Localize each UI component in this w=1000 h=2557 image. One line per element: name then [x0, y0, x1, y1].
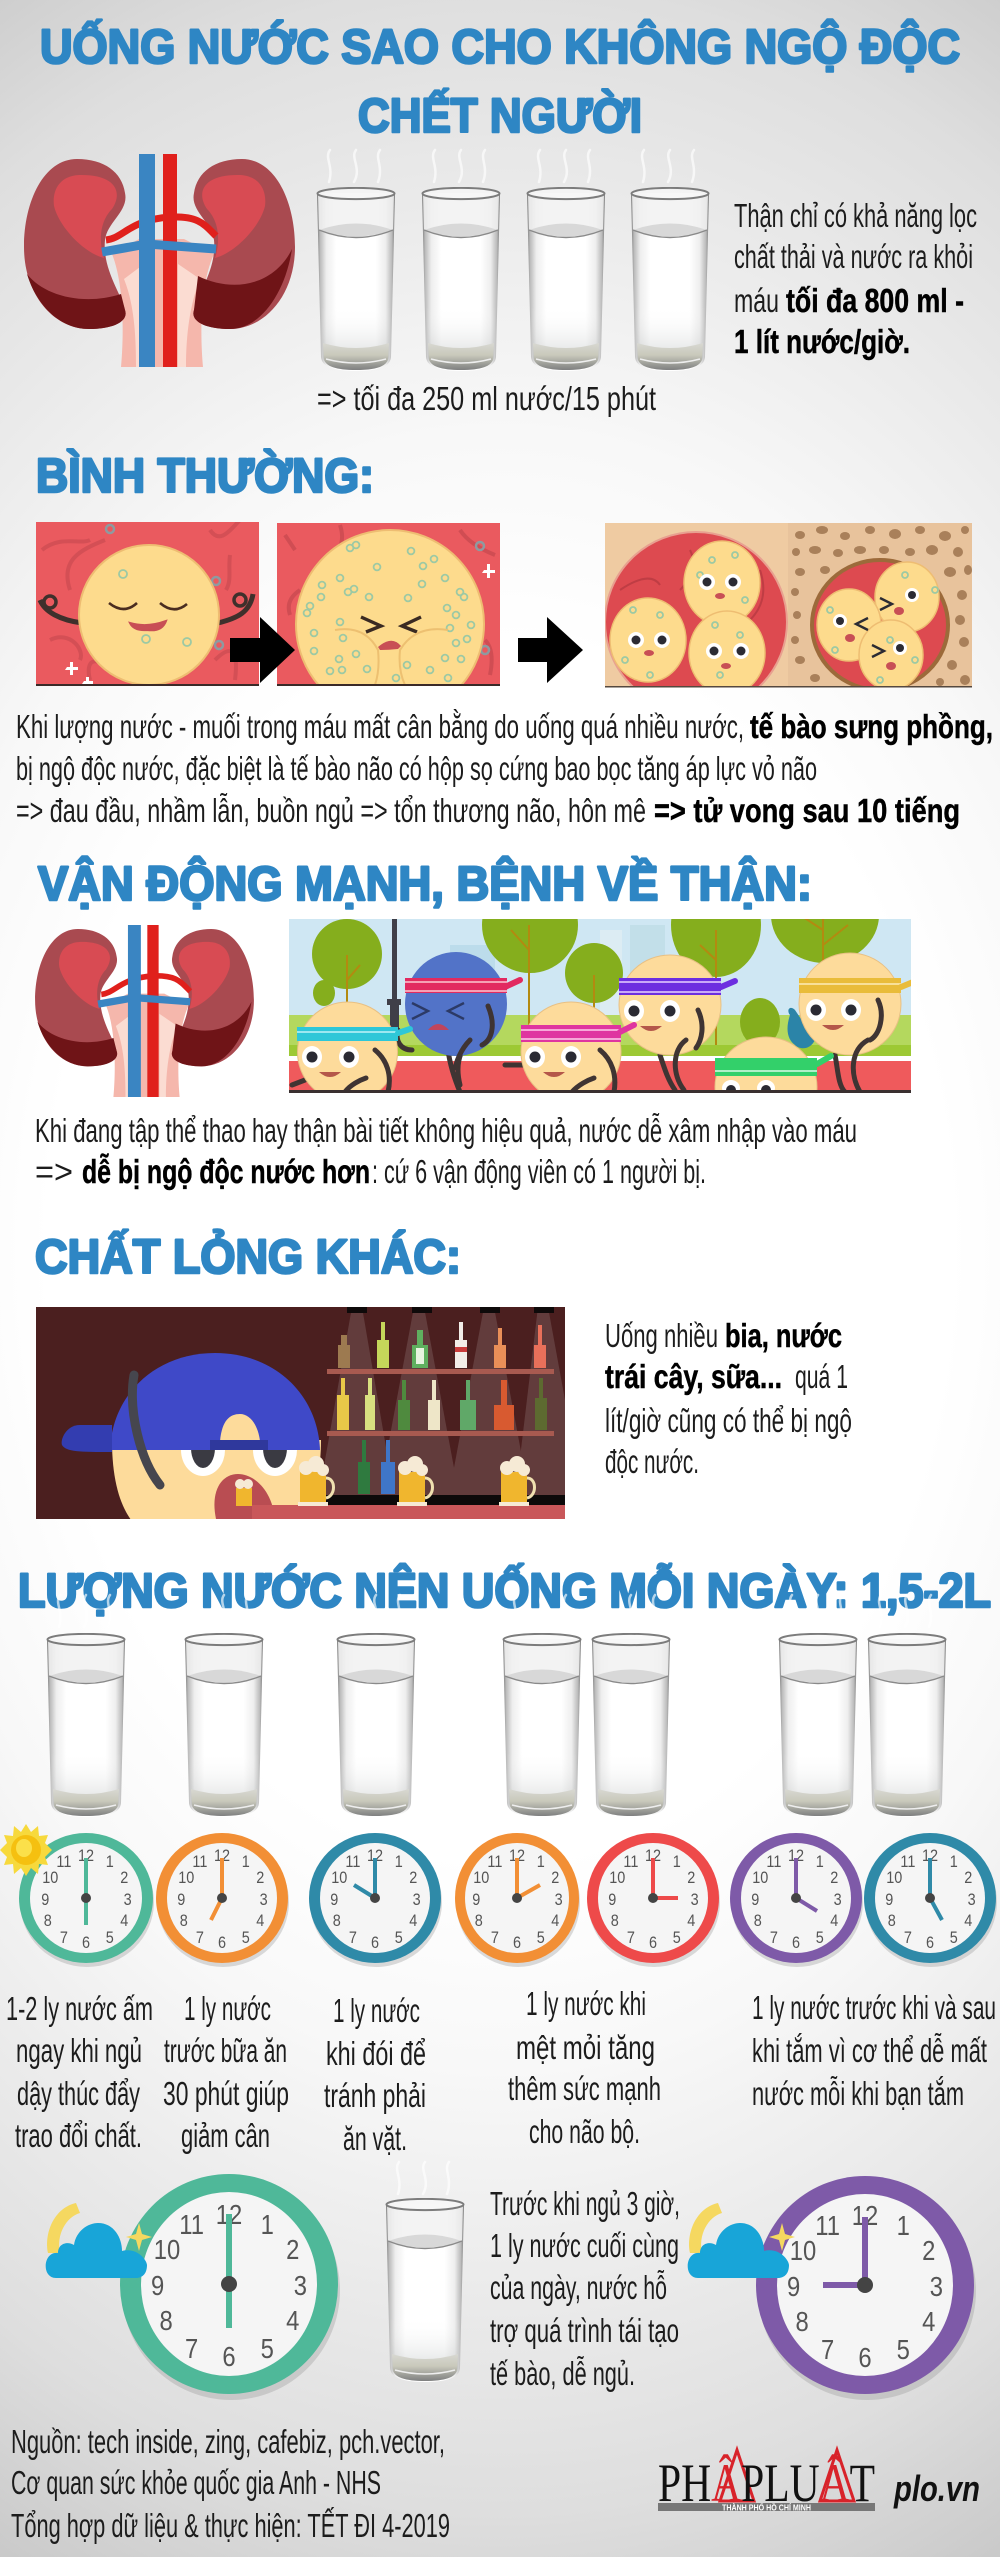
clock 4:00: 6 — [792, 1934, 800, 1952]
icon: kidneys small — [35, 925, 254, 1097]
clock 6:00: 8 — [44, 1912, 52, 1930]
caption: wake up: trao đổi chất. — [15, 2117, 142, 2154]
clock 6:00: 4 — [120, 1912, 128, 1930]
heading: other liquids: CHẤT LỎNG KHÁC: — [35, 1229, 461, 1284]
big clock 18:00 — [120, 2174, 340, 2400]
clock 10:00: 4 — [409, 1912, 417, 1930]
big clock 18:00: 2 — [286, 2233, 299, 2265]
clock 5:00: 12 — [922, 1847, 938, 1865]
big clock 21:00: 8 — [795, 2305, 809, 2337]
clock 4:00: 1 — [816, 1853, 824, 1871]
caption: when hungry: ăn vặt. — [343, 2120, 407, 2157]
big clock 21:00: 6 — [858, 2341, 872, 2373]
big clock 18:00: 7 — [185, 2332, 198, 2364]
source credits — [11, 2423, 450, 2544]
caption: wake up — [6, 1990, 153, 2154]
clock 10:00: 3 — [413, 1891, 421, 1909]
text: other liquids explanation: Uống nhiều — [605, 1317, 718, 1354]
source credits: Tổng hợp dữ liệu & thực hiện: TẾT ĐI 4-2019 — [11, 2507, 450, 2544]
clock 6:00: 1 — [106, 1853, 114, 1871]
clock 3:00 — [587, 1833, 720, 1967]
caption: when hungry: tránh phải — [324, 2077, 426, 2114]
text: other liquids explanation — [605, 1317, 852, 1480]
clock 5:00: 1 — [950, 1853, 958, 1871]
clock 6:00: 11 — [56, 1853, 71, 1871]
clock 4:00: 10 — [752, 1869, 769, 1887]
clock 10:00: 5 — [395, 1929, 403, 1947]
clock 10:00: 10 — [331, 1869, 348, 1887]
logo: plo.vn: plo.vn — [893, 2468, 980, 2509]
big clock 21:00: 5 — [897, 2333, 910, 2365]
caption: before meal: 1 ly nước — [184, 1990, 271, 2027]
clock 10:00: 7 — [349, 1929, 357, 1947]
clock 7:00: 3 — [260, 1891, 268, 1909]
big clock 18:00: 1 — [261, 2208, 274, 2240]
clock 4:00: 7 — [770, 1929, 778, 1947]
clock 4:00: 12 — [788, 1847, 804, 1865]
clock 5:00: 9 — [885, 1891, 893, 1909]
text: before sleep: trợ quá trình tái tạo — [490, 2312, 679, 2349]
clock 2:00: 10 — [473, 1869, 490, 1887]
big clock 21:00: 3 — [930, 2270, 943, 2302]
title: CHẾT NGƯỜI — [358, 88, 642, 143]
clock 5:00 — [864, 1833, 997, 1967]
clock 7:00: 4 — [256, 1912, 264, 1930]
clock 7:00: 6 — [218, 1934, 226, 1952]
clock 4:00: 2 — [830, 1869, 838, 1887]
clock 6:00 — [19, 1833, 154, 1967]
big clock 21:00: 7 — [821, 2333, 834, 2365]
clock 2:00: 1 — [537, 1853, 545, 1871]
caption: before meal: 30 phút giúp — [163, 2075, 289, 2112]
clock 6:00: 3 — [124, 1891, 132, 1909]
clock 6:00: 7 — [60, 1929, 68, 1947]
clock 3:00: 9 — [608, 1891, 616, 1909]
text: exercise explanation: : cứ 6 vận động viên có 1 người bị. — [372, 1153, 706, 1190]
clock 5:00: 10 — [886, 1869, 903, 1887]
icon: moon and cloud right — [688, 2203, 795, 2278]
caption: bathing — [752, 1989, 996, 2112]
clock 5:00: 5 — [950, 1929, 958, 1947]
clock 7:00: 8 — [180, 1912, 188, 1930]
text: before sleep: 1 ly nước cuối cùng — [490, 2227, 679, 2264]
clock 10:00: 8 — [333, 1912, 341, 1930]
text: before sleep: Trước khi ngủ 3 giờ, — [490, 2185, 680, 2222]
clock 3:00: 3 — [691, 1891, 699, 1909]
clock 7:00: 1 — [242, 1853, 250, 1871]
big clock 18:00: 6 — [222, 2340, 236, 2372]
title: UỐNG NƯỚC SAO CHO KHÔNG NGỘ ĐỘC — [40, 19, 960, 74]
clock 2:00: 12 — [509, 1847, 525, 1865]
logo: Pháp Luật: PHÂPLUÂT — [658, 2453, 875, 2513]
big clock 21:00: 12 — [852, 2199, 878, 2231]
clock 3:00: 11 — [623, 1853, 638, 1871]
icon: sun — [0, 1824, 52, 1876]
clock 5:00: 6 — [926, 1934, 934, 1952]
text: before sleep: của ngày, nước hỗ — [490, 2269, 667, 2306]
clock 7:00: 10 — [178, 1869, 195, 1887]
logo: Pháp Luật: THÀNH PHỐ HỒ CHÍ MINH — [722, 2502, 811, 2512]
caption: when tired — [508, 1985, 661, 2150]
clock 2:00: 7 — [491, 1929, 499, 1947]
big clock 21:00: 2 — [922, 2234, 935, 2266]
clock 3:00: 6 — [649, 1934, 657, 1952]
caption: when hungry — [324, 1992, 426, 2157]
big clock 18:00: 5 — [261, 2332, 274, 2364]
big clock 21:00: 1 — [897, 2209, 910, 2241]
caption: when tired: thêm sức mạnh — [508, 2070, 661, 2107]
clock 4:00: 4 — [830, 1912, 838, 1930]
text: kidney filter capacity: máu — [734, 282, 779, 319]
clock 5:00: 11 — [900, 1853, 915, 1871]
big clock 18:00: 11 — [179, 2208, 204, 2240]
caption: when tired: 1 ly nước khi — [526, 1985, 646, 2022]
clock 10:00: 9 — [330, 1891, 338, 1909]
arrow 1 — [230, 617, 295, 683]
clock 5:00: 4 — [964, 1912, 972, 1930]
panel: calm cell — [36, 520, 259, 688]
clock 7:00: 12 — [214, 1847, 230, 1865]
panel: swollen cell — [277, 523, 500, 686]
text: exercise explanation: dễ bị ngộ độc nước hơn — [82, 1153, 370, 1190]
clock 4:00 — [730, 1833, 863, 1967]
panel: bar scene — [36, 1307, 565, 1525]
clock 6:00: 9 — [41, 1891, 49, 1909]
caption: wake up: dậy thúc đẩy — [17, 2075, 140, 2112]
clock 2:00: 3 — [555, 1891, 563, 1909]
icon: kidneys — [24, 154, 295, 367]
glass before bed — [386, 2162, 464, 2382]
caption: wake up: 1-2 ly nước ấm — [6, 1990, 153, 2027]
big clock 21:00: 9 — [787, 2270, 800, 2302]
text: kidney filter capacity: 1 lít nước/giờ. — [734, 323, 910, 360]
clock 6:00: 2 — [120, 1869, 128, 1887]
clock 6:00: 5 — [106, 1929, 114, 1947]
four water glasses — [317, 150, 709, 371]
clock 3:00: 12 — [645, 1847, 661, 1865]
clock 7:00: 2 — [256, 1869, 264, 1887]
caption: when tired: cho não bộ. — [529, 2113, 640, 2150]
clock 5:00: 7 — [904, 1929, 912, 1947]
text: kidney filter capacity: tối đa 800 ml - — [786, 282, 964, 319]
caption: before meal: trước bữa ăn — [164, 2032, 287, 2069]
source credits: Cơ quan sức khỏe quốc gia Anh - NHS — [11, 2464, 381, 2501]
text: max per 15 minutes: => tối đa 250 ml nước/15 phút — [317, 380, 656, 417]
row of seven glasses — [47, 1595, 946, 1817]
clock 3:00: 5 — [673, 1929, 681, 1947]
text: exercise explanation: => — [35, 1153, 73, 1190]
caption: before meal — [163, 1990, 289, 2154]
clock 5:00: 3 — [968, 1891, 976, 1909]
text: cell swelling explanation: => đau đầu, nhầm lẫn, buồn ngủ => tổn thương não, hôn mê — [16, 792, 646, 829]
clock 2:00: 11 — [487, 1853, 502, 1871]
clock 5:00: 8 — [888, 1912, 896, 1930]
text: other liquids explanation: lít/giờ cũng có thể bị ngộ — [605, 1402, 852, 1439]
clock 10:00 — [309, 1833, 442, 1967]
panel baseline — [605, 686, 972, 688]
clock 4:00: 8 — [754, 1912, 762, 1930]
clock 2:00: 9 — [472, 1891, 480, 1909]
clock 7:00 — [156, 1833, 289, 1967]
caption: before meal: giảm cân — [181, 2117, 270, 2154]
clock 2:00: 8 — [475, 1912, 483, 1930]
clock 6:00: 6 — [82, 1934, 90, 1952]
clock 2:00 — [455, 1833, 580, 1967]
clock 10:00: 11 — [345, 1853, 360, 1871]
text: other liquids explanation: bia, nước — [725, 1317, 842, 1354]
clock 7:00: 5 — [242, 1929, 250, 1947]
clock 4:00: 9 — [751, 1891, 759, 1909]
text: before sleep — [490, 2185, 680, 2392]
clock 3:00: 4 — [687, 1912, 695, 1930]
clock 10:00: 1 — [395, 1853, 403, 1871]
text: other liquids explanation: quá 1 — [795, 1358, 848, 1395]
big clock 18:00: 3 — [294, 2269, 307, 2301]
text: exercise explanation — [35, 1112, 857, 1190]
clock 3:00: 10 — [609, 1869, 626, 1887]
clock 4:00: 5 — [816, 1929, 824, 1947]
clock 6:00: 12 — [78, 1847, 94, 1865]
clock 3:00: 7 — [627, 1929, 635, 1947]
panel: brain cells in skull — [605, 523, 972, 686]
big clock 21:00 — [756, 2176, 976, 2400]
clock 3:00: 2 — [687, 1869, 695, 1887]
clock 7:00: 9 — [177, 1891, 185, 1909]
clock 10:00: 6 — [371, 1934, 379, 1952]
clock 5:00: 2 — [964, 1869, 972, 1887]
caption: wake up: ngay khi ngủ — [16, 2032, 142, 2069]
source credits: Nguồn: tech inside, zing, cafebiz, pch.vector, — [11, 2423, 445, 2460]
clock 7:00: 11 — [192, 1853, 207, 1871]
heading: exercise and kidney disease: VẬN ĐỘNG MẠNH, BỆNH VỀ THẬN: — [38, 856, 812, 911]
text: other liquids explanation: độc nước. — [605, 1443, 699, 1480]
clock 2:00: 5 — [537, 1929, 545, 1947]
clock 4:00: 3 — [834, 1891, 842, 1909]
caption: when hungry: khi đói để — [326, 2035, 426, 2072]
big clock 21:00: 10 — [790, 2234, 816, 2266]
text: before sleep: tế bào, dễ ngủ. — [490, 2355, 635, 2392]
big clock 21:00: 4 — [922, 2305, 935, 2337]
heading: normal: BÌNH THƯỜNG: — [36, 448, 374, 503]
big clock 18:00: 9 — [151, 2269, 164, 2301]
clock 3:00: 1 — [673, 1853, 681, 1871]
clock 10:00: 12 — [367, 1847, 383, 1865]
icon: moon and cloud left — [46, 2203, 152, 2278]
clock 2:00: 4 — [551, 1912, 559, 1930]
clock 4:00: 11 — [766, 1853, 781, 1871]
clock 2:00: 2 — [551, 1869, 559, 1887]
big clock 18:00: 10 — [154, 2233, 180, 2265]
arrow 2 — [518, 617, 583, 683]
text: other liquids explanation: trái cây, sữa... — [605, 1358, 782, 1395]
clock 7:00: 7 — [196, 1929, 204, 1947]
clock 2:00: 6 — [513, 1934, 521, 1952]
big clock 18:00: 8 — [159, 2304, 173, 2336]
text: kidney filter capacity — [734, 197, 977, 360]
caption: when tired: mệt mỏi tăng — [516, 2029, 655, 2066]
clock 10:00: 2 — [409, 1869, 417, 1887]
panel: runners — [289, 919, 911, 1093]
title — [40, 19, 960, 143]
text: cell swelling explanation — [16, 708, 993, 829]
clock 6:00: 10 — [42, 1869, 59, 1887]
clock 3:00: 8 — [611, 1912, 619, 1930]
caption: when hungry: 1 ly nước — [333, 1992, 420, 2029]
big clock 18:00: 4 — [286, 2304, 299, 2336]
big clock 21:00: 11 — [815, 2209, 840, 2241]
big clock 18:00: 12 — [216, 2198, 242, 2230]
